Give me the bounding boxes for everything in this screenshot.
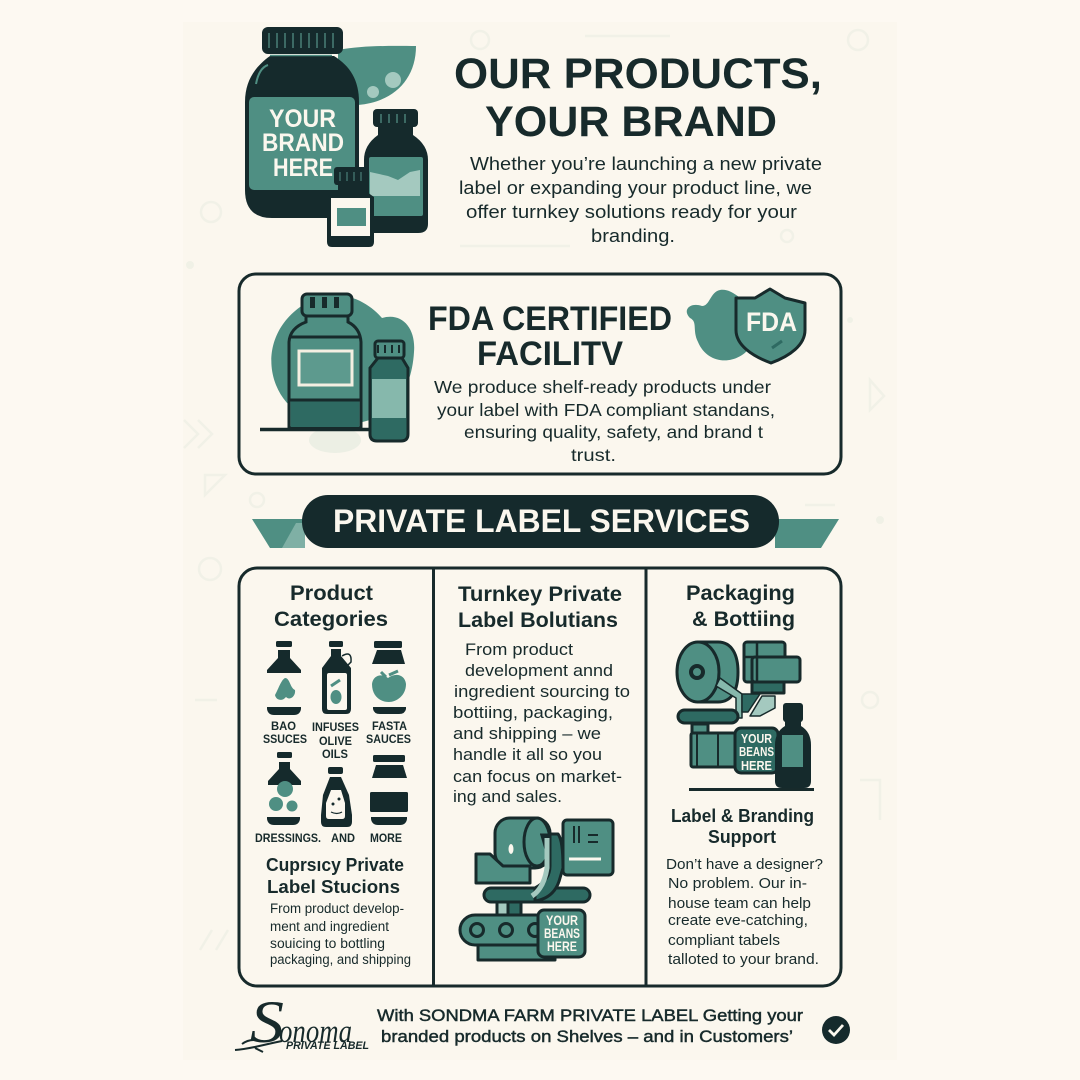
icon: packaging machine and bottle: HERE xyxy=(741,758,772,773)
banner heading: PRIVATE LABEL SERVICES xyxy=(333,503,750,539)
icon: dressing bottle xyxy=(267,752,301,825)
heading: product categories: Product xyxy=(290,582,373,605)
heading: packaging: & Bottiing xyxy=(692,608,795,631)
column 3 description: No problem. Our in- xyxy=(668,875,807,892)
icon: BBQ sauce xyxy=(267,641,301,715)
FDA description text: ensuring quality, safety, and brand t xyxy=(464,422,763,442)
icon labels, row 1: OILS xyxy=(322,747,348,761)
icon: labelling machine xyxy=(460,818,613,960)
heading: FDA certified facility: FDA CERTIFIED xyxy=(428,300,672,338)
icon: FDA shield xyxy=(687,289,805,363)
subheading: private label solutions: Cuprsıcy Private xyxy=(266,854,404,875)
banner: private label services xyxy=(252,495,839,548)
title xyxy=(454,50,822,146)
icon: infused olive oil xyxy=(322,641,351,714)
icon: FDA bottles on shelf xyxy=(260,294,414,453)
icon: large bottle with label: HERE xyxy=(273,154,333,182)
heading: turnkey xyxy=(458,583,622,632)
footer logo: Sonoma Private Label xyxy=(235,989,369,1055)
column: product categories xyxy=(255,582,411,967)
subheading: label and branding support: Support xyxy=(708,826,776,847)
footer tagline: With SONDMA FARM PRIVATE LABEL Getting your xyxy=(377,1007,804,1025)
footer logo: Sonoma Private Label: S xyxy=(250,989,284,1055)
icon labels, row 1: OLIVE xyxy=(319,734,352,748)
icon: large bottle with label: BRAND xyxy=(262,129,344,157)
icon labels, row 1: SAUCES xyxy=(366,732,411,746)
icon labels, row 2: MORE xyxy=(370,831,402,845)
title: OUR PRODUCTS, xyxy=(454,50,822,98)
icon: labelling machine: HERE xyxy=(547,939,577,954)
column 2 description: can focus on market- xyxy=(453,767,622,786)
heading: turnkey: Label Bolutians xyxy=(458,609,618,632)
footer logo: Sonoma Private Label: PRIVATE LABEL xyxy=(286,1040,369,1052)
column 3 description xyxy=(666,856,823,968)
icon labels, row 1: SSUCES xyxy=(263,732,307,746)
title: YOUR BRAND xyxy=(485,98,777,146)
column 2 description: handle it all so you xyxy=(453,745,602,764)
icon: small bottle xyxy=(327,167,374,247)
banner pill xyxy=(302,495,779,548)
FDA description text: We produce shelf-ready products under xyxy=(434,377,771,397)
heading: FDA certified facility: FACILITV xyxy=(477,335,623,373)
panel: services table xyxy=(239,568,841,986)
FDA description text: your label with FDA compliant standans, xyxy=(437,400,775,420)
column 2 description: ingredient sourcing to xyxy=(454,682,630,701)
column 2 description: and shipping – we xyxy=(453,724,601,743)
icon: packaging machine and bottle: BEANS xyxy=(739,744,774,759)
icon: more jar xyxy=(370,755,408,825)
heading: product categories xyxy=(274,582,388,631)
column 2 description: development annd xyxy=(465,661,613,680)
column 3 description: house team can help xyxy=(668,895,811,912)
heading: packaging: Packaging xyxy=(686,582,795,605)
icon: large bottle with label xyxy=(245,27,359,218)
icon: check mark xyxy=(822,1016,850,1044)
subheading: label and branding support xyxy=(671,805,814,847)
icon: bottle with face xyxy=(321,767,352,827)
column 3 description: compliant tabels xyxy=(668,932,780,949)
heading: packaging xyxy=(686,582,795,631)
hero: product bottles illustration xyxy=(245,27,428,247)
column 3 description: Don’t have a designer? xyxy=(666,856,823,873)
subheading: private label solutions xyxy=(266,854,404,897)
column 1 description: packaging, and shipping xyxy=(270,952,411,967)
icon: leaf behind bottles xyxy=(338,46,416,105)
intro text block: branding. xyxy=(591,226,675,246)
column 1 description: From product develop- xyxy=(270,901,404,916)
column 2 description: bottiing, packaging, xyxy=(453,703,613,722)
intro text block: label or expanding your product line, we xyxy=(459,178,812,198)
icon: large bottle with label: YOUR xyxy=(269,105,336,133)
FDA description text: trust. xyxy=(571,445,616,465)
icon labels, row 1: BAO xyxy=(271,719,296,733)
column 2 description: ing and sales. xyxy=(453,787,562,806)
heading: turnkey: Turnkey Private xyxy=(458,583,622,606)
icon: packaging machine and bottle xyxy=(677,642,814,791)
column 1 description: ment and ingredient xyxy=(270,919,389,934)
footer tagline xyxy=(377,1007,804,1046)
footer logo: Sonoma Private Label: onoma xyxy=(279,1014,352,1050)
column: packaging and bottling xyxy=(666,582,823,968)
panel: FDA certified facility xyxy=(239,274,841,474)
icon labels, row 1: INFUSES xyxy=(312,720,359,734)
icon: medium bottle xyxy=(364,109,428,233)
column 1 description: souicing to bottling xyxy=(270,936,385,951)
icon: pasta sauce jar xyxy=(372,641,406,714)
subheading: private label solutions: Label Stucions xyxy=(267,876,400,897)
subheading: label and branding support: Label & Branding xyxy=(671,805,814,826)
heading: product categories: Categories xyxy=(274,608,388,631)
column: turnkey private label solutions xyxy=(453,583,630,960)
column 1 description xyxy=(270,901,411,967)
intro text block: Whether you’re launching a new private xyxy=(470,154,822,174)
heading: FDA certified facility xyxy=(428,300,672,373)
ribbon left xyxy=(252,519,305,548)
icon labels, row 1 xyxy=(263,719,411,761)
icon: FDA shield: FDA xyxy=(746,307,797,337)
icon labels, row 2 xyxy=(255,831,402,845)
FDA description text xyxy=(434,377,775,465)
column 2 description: From product xyxy=(465,640,573,659)
icon labels, row 2: AND xyxy=(331,831,355,845)
intro text block xyxy=(459,154,822,246)
icon: labelling machine: YOUR xyxy=(546,913,578,928)
icon labels, row 2: DRESSINGS. xyxy=(255,831,321,845)
icon: labelling machine: BEANS xyxy=(544,926,580,941)
intro text block: offer turnkey solutions ready for your xyxy=(466,202,797,222)
footer tagline: branded products on Shelves – and in Customers’ xyxy=(381,1028,793,1046)
ribbon right xyxy=(775,519,839,548)
column 3 description: create eve-catching, xyxy=(668,912,808,929)
column 3 description: talloted to your brand. xyxy=(668,951,819,968)
column 2 description xyxy=(453,640,630,806)
icon: packaging machine and bottle: YOUR xyxy=(741,731,773,746)
icon labels, row 1: FASTA xyxy=(372,719,407,733)
